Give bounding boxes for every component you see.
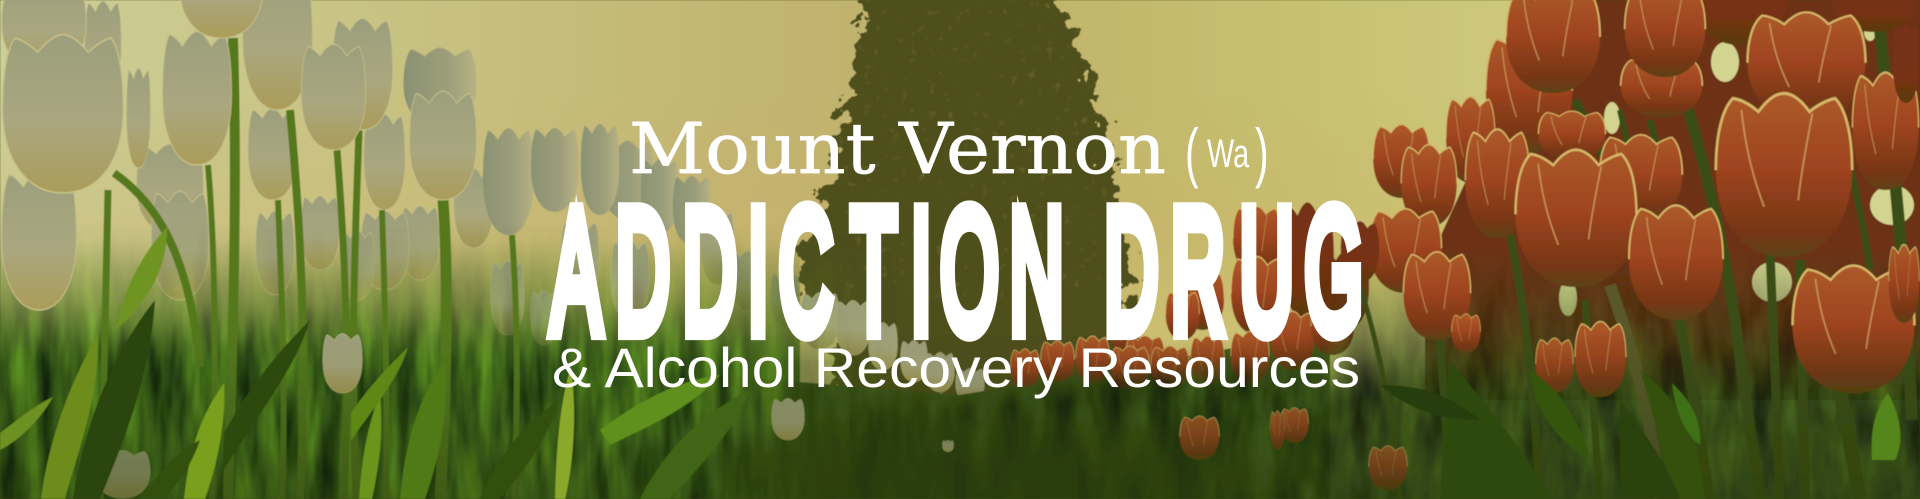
- dark foliage blades: [850, 250, 1920, 499]
- green stems left: [100, 38, 517, 499]
- ground left: [0, 240, 800, 499]
- orange tulips right: [1180, 0, 1919, 490]
- bottom shade: [0, 330, 1920, 499]
- backing of right tulip mass: [1425, 0, 1920, 400]
- grass texture left: [0, 220, 900, 499]
- title: Mount Vernon: Mount Vernon: [629, 108, 1166, 190]
- grass blades: [0, 220, 900, 499]
- dark centre path: [710, 380, 1310, 499]
- tree sky specks: [840, 0, 1110, 300]
- tree outline: [796, 0, 1130, 400]
- sky gaps between right tulips: [1559, 23, 1914, 316]
- closing parenthesis: ): [1255, 115, 1269, 189]
- grass texture right and centre: [850, 250, 1920, 499]
- subtitle: Alcohol Recovery Resources: & Alcohol Recovery Resources: [552, 336, 1360, 399]
- sky horizon glow: [0, 90, 1920, 360]
- green leaves left: [0, 227, 750, 499]
- state abbreviation: Wa: [1207, 131, 1250, 176]
- ground centre: [650, 330, 1330, 499]
- white tulips back row: [136, 48, 649, 345]
- heading: Addiction Drug: ADDICTION DRUG: [551, 175, 1363, 369]
- white tulips front row: [2, 0, 954, 498]
- distant orange tulips: [1011, 202, 1369, 390]
- stems right: [1360, 30, 1912, 499]
- tree silhouette: [796, 0, 1130, 400]
- opening parenthesis: (: [1185, 115, 1199, 189]
- distant white tulips: [601, 141, 984, 402]
- state tag: (Wa): [1185, 115, 1269, 189]
- green leaves right: [1380, 360, 1900, 499]
